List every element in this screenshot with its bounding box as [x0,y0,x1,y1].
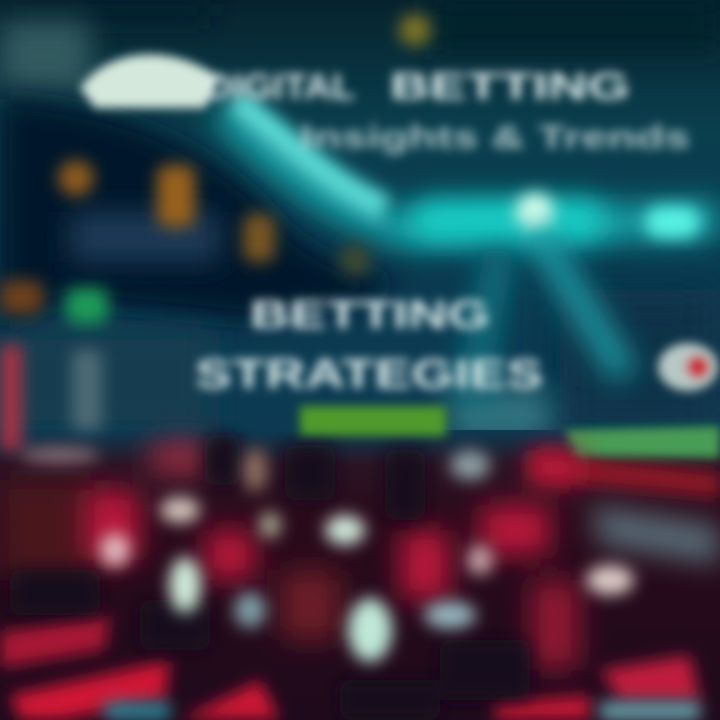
icon: green marker [66,288,108,324]
crowd: red patches [85,440,580,670]
heading: top title: Insights & Trends [300,119,690,155]
crowd: dark patches [10,435,530,720]
heading: top title [80,54,690,155]
grey column [72,350,102,430]
heading: betting strategies: STRATEGIES [195,350,543,397]
green bar [300,406,446,436]
heading: betting strategies [195,293,543,397]
left red post [0,345,22,450]
panel: upper background [0,0,720,440]
icon: red and white badge [658,343,718,391]
icons: orange markers [0,160,370,314]
crowd: white highlights [20,447,634,662]
icon: yellow emblem [399,14,431,46]
cyan glow stream [215,100,720,400]
heading: top title: DIGITAL [205,66,355,107]
heading: betting strategies: BETTING [250,293,490,337]
heading: top title: BETTING [390,66,630,108]
panel: lower red field [0,430,720,720]
green strip [565,426,720,458]
